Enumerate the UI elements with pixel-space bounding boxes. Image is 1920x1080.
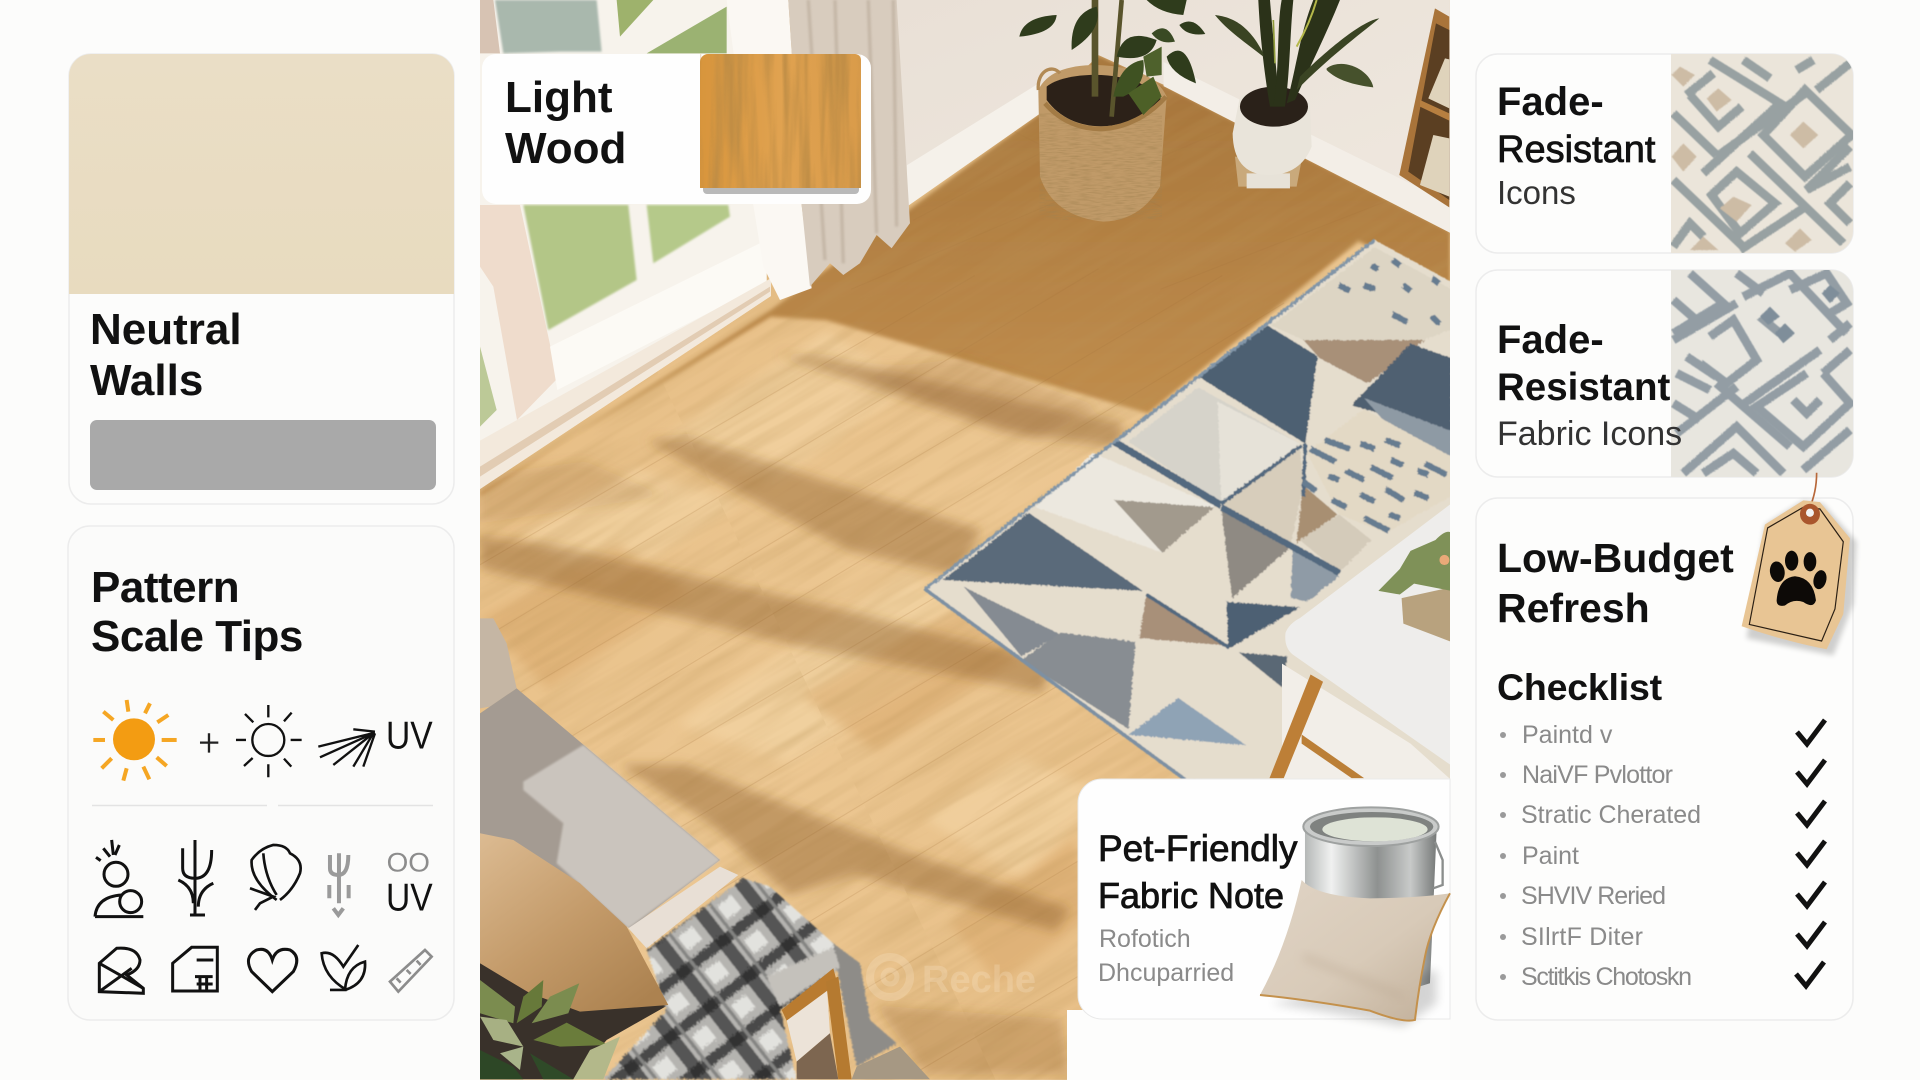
wall shelf with books bbox=[1399, 8, 1449, 207]
heading: neutral walls bbox=[90, 305, 242, 405]
snake plant leaves bbox=[1215, 0, 1379, 107]
check marks bbox=[1796, 720, 1825, 986]
note text bbox=[1098, 925, 1234, 987]
heading: checklist: Checklist bbox=[1497, 666, 1663, 708]
curtains bbox=[766, 0, 910, 300]
sofa base below frame bbox=[787, 983, 830, 1062]
heading: low-budget refresh: Refresh bbox=[1497, 585, 1650, 631]
heading: fade-resistant: Fade- bbox=[1497, 80, 1604, 124]
checklist items: Sctitkis Chotoskn bbox=[1521, 963, 1692, 991]
heading: pet-friendly fabric note bbox=[1098, 828, 1298, 916]
icon: leaves bbox=[322, 945, 365, 990]
swatch: grey bar bbox=[90, 420, 436, 490]
wooden sofa frame bbox=[782, 968, 837, 1021]
swatch: meander pattern bbox=[1671, 270, 1853, 477]
paint can bbox=[1303, 807, 1443, 993]
heading: resistant: Resistant bbox=[1497, 129, 1656, 171]
panel: pattern scale tips bbox=[68, 526, 454, 1020]
patterned rug bbox=[925, 240, 1451, 780]
heading: light wood: Wood bbox=[505, 124, 626, 173]
heading: neutral walls: Neutral bbox=[90, 305, 242, 354]
panel: light wood bbox=[482, 54, 871, 204]
icon: plant stalk bbox=[178, 840, 213, 915]
watermark bbox=[870, 957, 1036, 1001]
heading: pattern scale tips: Pattern bbox=[91, 563, 239, 612]
icon: envelope bbox=[99, 948, 143, 993]
label: oo: OO bbox=[387, 848, 430, 878]
icon: paw tag bbox=[1742, 473, 1857, 656]
heading: pattern scale tips bbox=[91, 563, 303, 661]
fabric pillow bbox=[1260, 880, 1450, 1027]
label: uv small: UV bbox=[386, 877, 433, 920]
heading: fade-resistant: Fade- bbox=[1497, 318, 1604, 362]
heading: resistant bold: Resistant bbox=[1497, 366, 1670, 409]
window bbox=[480, 0, 771, 489]
subheading: icons: Icons bbox=[1497, 174, 1576, 211]
icon: person bbox=[95, 840, 143, 917]
divider bbox=[92, 804, 433, 806]
potted plants and shelf bbox=[1019, 0, 1449, 222]
white base below fabric note bbox=[1067, 1010, 1450, 1080]
panel: low-budget refresh checklist bbox=[1476, 473, 1857, 1020]
white side table bbox=[1269, 504, 1451, 780]
wall and baseboards bbox=[894, 0, 1450, 233]
heading: light wood: Light bbox=[505, 73, 613, 122]
label: uv: UV bbox=[386, 714, 433, 757]
checklist items: Paintd v bbox=[1522, 721, 1613, 749]
panel: fade-resistant icons bbox=[1476, 54, 1853, 253]
heading: low-budget refresh: Low-Budget bbox=[1497, 535, 1734, 581]
checklist items: Stratic Cherated bbox=[1521, 801, 1701, 829]
checklist items: SIlrtF Diter bbox=[1521, 923, 1643, 951]
icon: orange sun bbox=[93, 700, 177, 781]
checklist items bbox=[1521, 721, 1701, 991]
watermark: Reche bbox=[922, 959, 1036, 1001]
icon: outline sun bbox=[236, 705, 302, 777]
subheading: fabric icons: Fabric Icons bbox=[1497, 415, 1682, 453]
icon: document bbox=[173, 947, 217, 991]
note text: Rofotich bbox=[1099, 925, 1191, 953]
checklist items: SHVIV Reried bbox=[1521, 882, 1666, 910]
paw print bbox=[1768, 551, 1828, 606]
heading: neutral walls: Walls bbox=[90, 356, 203, 405]
icon: leaf bloom bbox=[250, 845, 301, 910]
white planter bbox=[1233, 87, 1312, 188]
panel: fade-resistant fabric icons bbox=[1476, 270, 1853, 477]
icon: grey fork bbox=[329, 853, 349, 915]
panel: pet-friendly fabric note bbox=[1078, 779, 1450, 1027]
swatch: diamond pattern bbox=[1671, 54, 1853, 253]
heading: light wood bbox=[505, 73, 626, 173]
throw blanket bbox=[603, 878, 897, 1079]
checklist items: NaiVF Pvlottor bbox=[1522, 761, 1673, 789]
icon: uv rays bbox=[318, 729, 375, 767]
heading: pattern scale tips: Scale Tips bbox=[91, 612, 303, 661]
icon: heart bbox=[248, 949, 297, 992]
leaves bbox=[480, 980, 620, 1079]
icon: ruler bbox=[390, 950, 432, 992]
bullets bbox=[1500, 732, 1506, 980]
room photo bbox=[480, 0, 1451, 1080]
basket plant leaves bbox=[1019, 0, 1205, 117]
panel: neutral walls bbox=[69, 54, 454, 504]
heading: low-budget refresh bbox=[1497, 535, 1734, 631]
icon: plus bbox=[200, 733, 218, 753]
paint can and pillow bbox=[1260, 807, 1450, 1027]
checklist items: Paint bbox=[1522, 842, 1579, 870]
floor bbox=[480, 0, 1450, 1080]
sofa with pillow and throw bbox=[480, 618, 930, 1079]
heading: pet-friendly fabric note: Fabric Note bbox=[1098, 875, 1284, 916]
heading: pet-friendly fabric note: Pet-Friendly bbox=[1098, 828, 1298, 869]
note text: Dhcuparried bbox=[1098, 959, 1234, 987]
swatch: neutral wall colour bbox=[69, 54, 454, 294]
wicker basket bbox=[1038, 65, 1167, 222]
swatch: oak wood bbox=[700, 54, 861, 194]
